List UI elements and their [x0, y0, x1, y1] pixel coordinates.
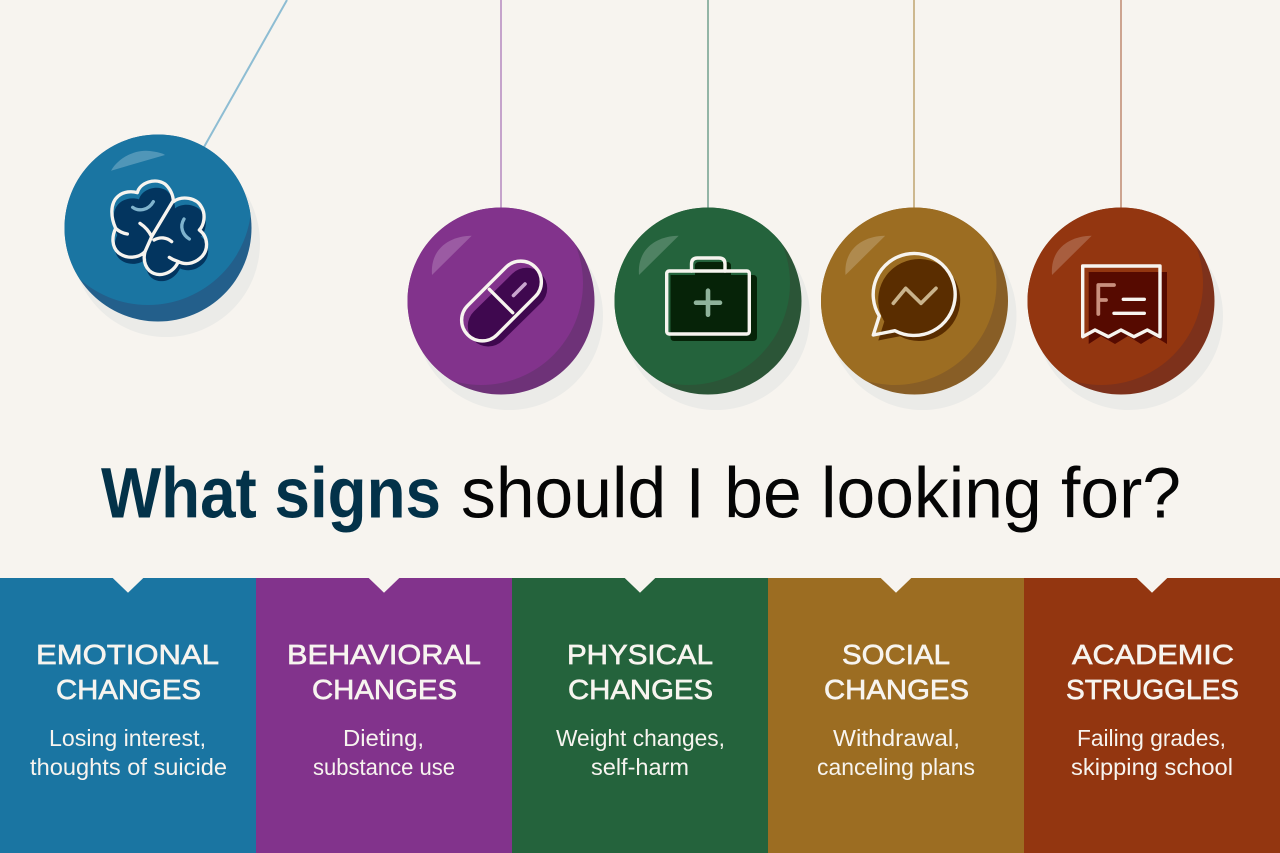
icon: pill capsule [453, 253, 550, 349]
pendulum ball: behavioral (purple) [408, 0, 603, 410]
icon: failing grade paper [1083, 266, 1167, 344]
panel: behavioral changes: BEHAVIORAL [287, 639, 481, 670]
panel: social changes [768, 578, 1024, 853]
pendulum ball: emotional (blue, swung out) [44, 0, 287, 337]
panel: behavioral changes [256, 578, 512, 853]
icon: first aid briefcase [667, 258, 757, 341]
panel: physical changes: CHANGES [568, 674, 713, 705]
panel: emotional changes: thoughts of suicide [30, 754, 227, 780]
pendulum ball: physical (green) [614, 0, 810, 410]
panel: social changes: SOCIAL [842, 639, 950, 670]
panel: emotional changes: Losing interest, [49, 725, 206, 751]
title: should I be looking for? [461, 454, 1181, 534]
panel: academic struggles: STRUGGLES [1066, 674, 1239, 705]
panel: emotional changes: CHANGES [56, 674, 201, 705]
panel: emotional changes: EMOTIONAL [36, 639, 219, 670]
panel: physical changes [512, 578, 768, 853]
panel: social changes: CHANGES [824, 674, 969, 705]
title: What signs [101, 454, 441, 534]
icon: brain [112, 181, 208, 281]
icon: speech bubble [873, 253, 960, 341]
panel: academic struggles: skipping school [1071, 754, 1233, 780]
panel: physical changes: PHYSICAL [567, 639, 713, 670]
panel: social changes: canceling plans [817, 754, 975, 780]
pendulum ball: academic (rust) [1028, 0, 1223, 410]
pendulum ball: social (gold) [821, 0, 1016, 410]
panel: behavioral changes: substance use [313, 754, 455, 780]
panel: behavioral changes: Dieting, [343, 725, 424, 751]
panel: behavioral changes: CHANGES [312, 674, 457, 705]
title [101, 454, 1181, 534]
panel: academic struggles: ACADEMIC [1072, 639, 1234, 670]
panel: physical changes: Weight changes, [556, 725, 725, 751]
panel: academic struggles: Failing grades, [1077, 725, 1226, 751]
panel: emotional changes [0, 578, 256, 853]
panel: academic struggles [1024, 578, 1280, 853]
panel: physical changes: self-harm [591, 754, 689, 780]
panel: social changes: Withdrawal, [833, 725, 960, 751]
